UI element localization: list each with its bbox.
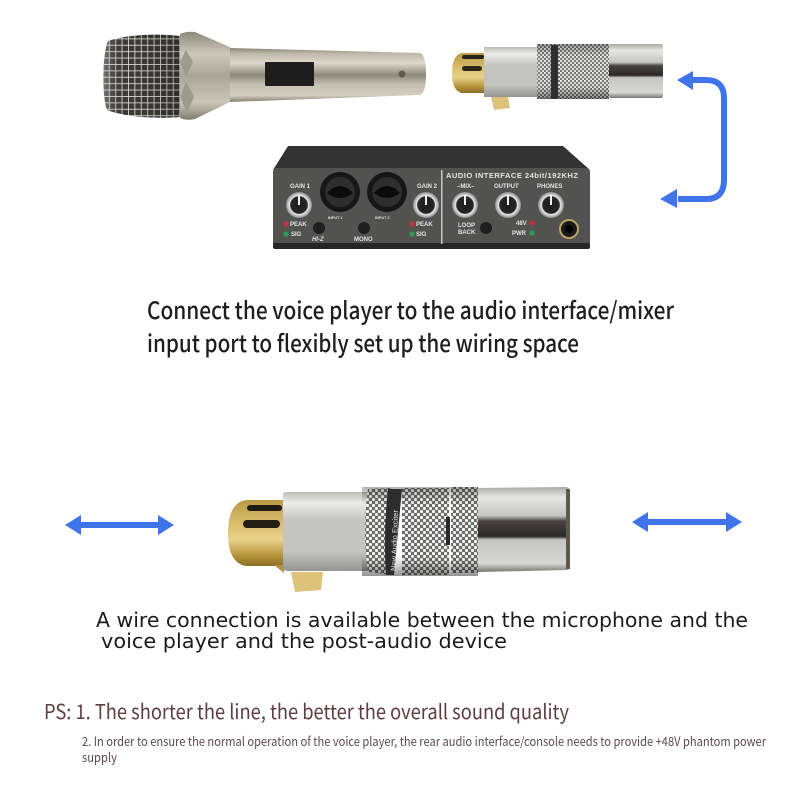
black band with engraved text: New Audio Exciter [389, 509, 400, 571]
caption: connect to audio interface: Connect the voice player to the audio interface/mixer [147, 291, 674, 326]
caption: wire connection: voice player and the post-audio device [101, 629, 507, 653]
interface labels: SIG [416, 232, 427, 238]
large gold shell [228, 500, 284, 566]
caption: connect to audio interface [147, 291, 674, 359]
caption: connect to audio interface: input port to flexibly set up the wiring space [147, 324, 579, 359]
interface labels: INPUT 2 [375, 216, 390, 220]
buttons [313, 222, 492, 234]
microphone grille [103, 35, 180, 118]
microphone switch [265, 62, 314, 86]
knurled ring [537, 44, 609, 99]
interface front panel [273, 168, 590, 249]
arrow: left double-headed [65, 515, 174, 535]
arrow: right double-headed [632, 512, 742, 532]
large knurled section [365, 488, 392, 575]
chrome end [609, 44, 663, 98]
audio interface [273, 146, 590, 249]
interface labels: GAIN 1 [290, 184, 311, 190]
interface labels: HI-Z [312, 237, 324, 243]
XLR combo input 2 [367, 172, 407, 212]
PS note 2 [82, 731, 766, 766]
interface labels [290, 171, 578, 243]
microphone collar [180, 32, 230, 120]
interface labels: OUTPUT [494, 184, 519, 190]
interface labels: PEAK [416, 222, 433, 228]
headphone jack [560, 220, 578, 238]
interface labels: AUDIO INTERFACE 24bit/192KHZ [446, 171, 578, 180]
gold XLR tab [491, 97, 510, 110]
interface labels: PHONES [537, 184, 562, 190]
microphone screw [398, 70, 406, 78]
knobs [286, 192, 564, 218]
XLR combo input 1 [320, 172, 360, 212]
interface labels: MONO [354, 237, 373, 243]
interface labels: INPUT 1 [328, 216, 343, 220]
small XLR connector [452, 44, 663, 110]
black band with engraved text [385, 489, 402, 575]
interface labels: LOOP [458, 223, 475, 229]
gold XLR shell [452, 53, 484, 93]
interface labels: PEAK [290, 222, 307, 228]
interface labels: SIG [291, 232, 302, 238]
large silver barrel [283, 492, 368, 571]
interface labels: –MIX– [457, 184, 475, 190]
caption: wire connection [96, 608, 748, 653]
interface labels: GAIN 2 [417, 184, 438, 190]
microphone [103, 32, 426, 120]
arrow: curved double-headed [660, 71, 724, 208]
caption: wire connection: A wire connection is available between the microphone and the [96, 608, 748, 632]
large gold tab [291, 572, 323, 592]
interface top panel [273, 146, 590, 170]
interface labels: 48V [516, 221, 527, 227]
PS note 1: PS: 1. The shorter the line, the better the overall sound quality [44, 695, 569, 725]
silver barrel [484, 47, 537, 97]
LEDs [283, 220, 535, 237]
large chrome end [478, 487, 570, 572]
large XLR connector [228, 487, 570, 592]
interface labels: BACK [458, 230, 476, 236]
interface labels: PWR [512, 231, 527, 237]
PS note 2: supply [82, 747, 117, 766]
microphone handle [229, 48, 426, 102]
